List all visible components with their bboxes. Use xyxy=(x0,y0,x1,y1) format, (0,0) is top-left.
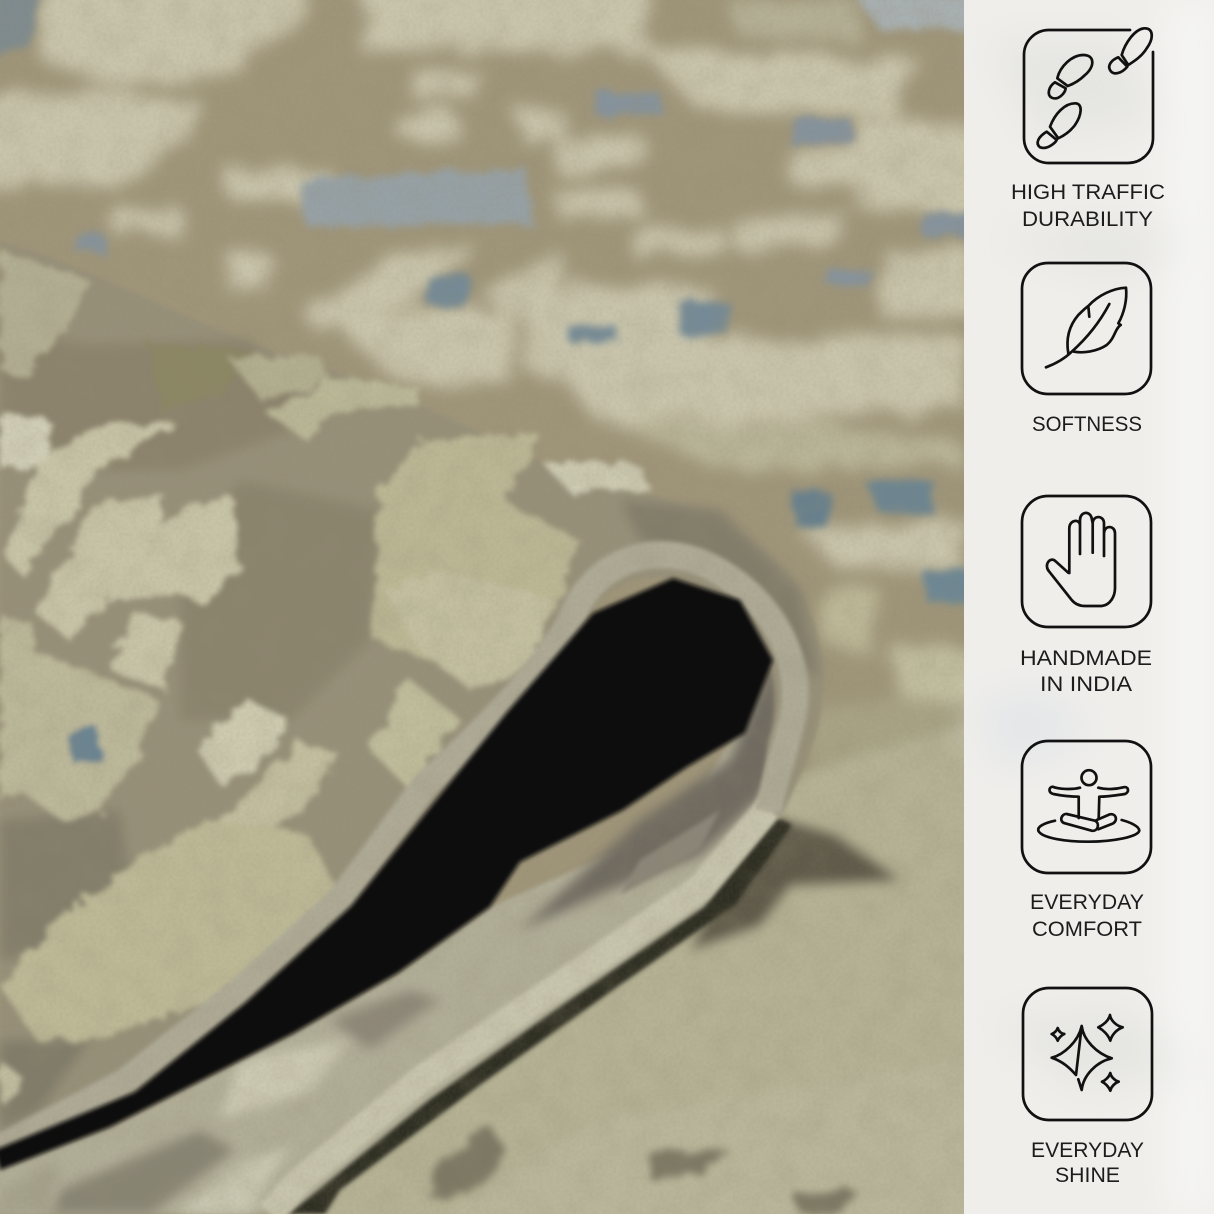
dark opening of roll xyxy=(0,578,773,1170)
label: high traffic durability: DURABILITY xyxy=(1022,208,1153,231)
icon: hand (handmade in india) xyxy=(1022,496,1151,627)
label: softness: SOFTNESS xyxy=(1032,413,1142,436)
label: everyday shine: EVERYDAY xyxy=(1031,1139,1144,1162)
label: handmade in india: IN INDIA xyxy=(1040,673,1132,696)
rug floor in front xyxy=(280,720,980,1214)
icon: feather (softness) xyxy=(1022,263,1151,394)
label: high traffic durability xyxy=(1011,181,1165,231)
photo mottling xyxy=(43,10,932,1194)
lower flap of rug xyxy=(0,650,800,1214)
rug pattern background xyxy=(0,0,980,780)
flap binding xyxy=(270,800,775,1214)
raised pile patches xyxy=(0,250,650,1110)
rolled rug top xyxy=(0,240,823,1163)
label: everyday comfort: EVERYDAY xyxy=(1030,891,1144,914)
photo grain xyxy=(35,454,654,1164)
brown flecks on floor xyxy=(430,1125,860,1214)
icon: seated meditation (everyday comfort) xyxy=(1022,741,1151,873)
icon: sparkles (everyday shine) xyxy=(1023,988,1152,1120)
label: handmade in india: HANDMADE xyxy=(1020,647,1152,670)
icon: footprints (high traffic durability) xyxy=(1024,28,1153,163)
label: everyday shine: SHINE xyxy=(1055,1164,1120,1187)
roll edge binding xyxy=(0,555,795,1148)
shadow under roll xyxy=(690,815,900,950)
label: everyday shine xyxy=(1031,1139,1144,1187)
label: everyday comfort: COMFORT xyxy=(1032,918,1142,941)
label: everyday comfort xyxy=(1030,891,1144,941)
label: handmade in india xyxy=(1020,647,1152,696)
panel: right icon column xyxy=(964,0,1214,1214)
blue flecks xyxy=(0,0,980,603)
label: high traffic durability: HIGH TRAFFIC xyxy=(1011,181,1165,204)
